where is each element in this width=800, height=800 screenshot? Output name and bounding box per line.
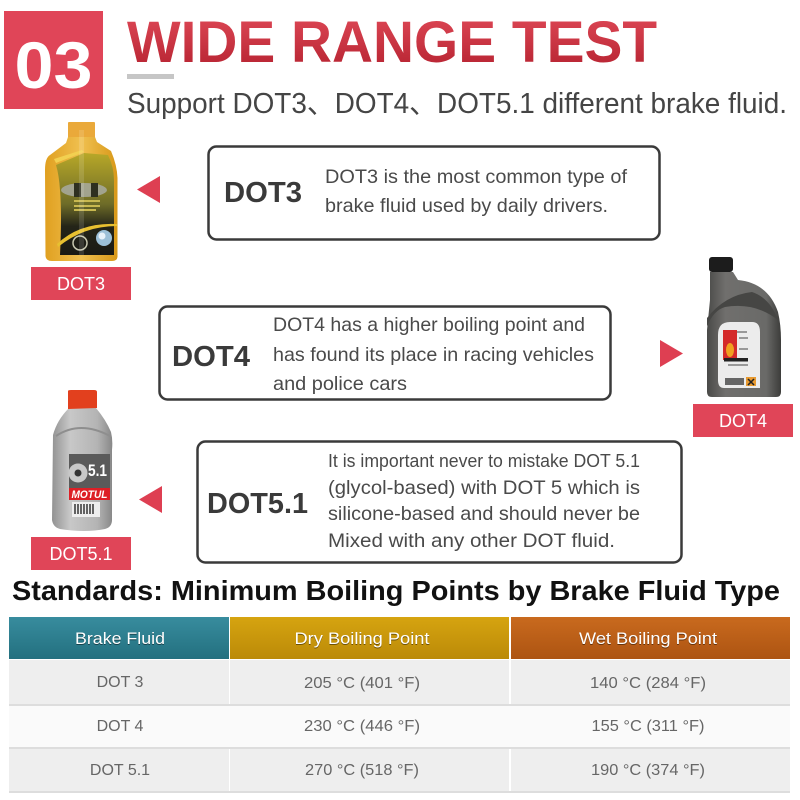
row: DOT 3 — [9, 660, 790, 706]
row: DOT 5.1 — [9, 749, 790, 793]
icon: DOT5.1 Motul bottle: 5.1 — [88, 461, 107, 480]
row: DOT 4: 155 °C (311 °F) — [592, 718, 704, 735]
row: DOT 4: DOT 4 — [97, 718, 144, 735]
panel: DOT5.1 description — [198, 442, 682, 562]
panel: DOT5.1 description: DOT5.1 — [207, 488, 308, 520]
panel: DOT5.1 description: Mixed with any other DOT fluid. — [328, 530, 615, 552]
panel: DOT5.1 description: It is important never to mistake DOT 5.1 — [328, 450, 640, 471]
icon: DOT5.1 Motul bottle: MOTUL — [72, 489, 108, 501]
row: DOT 3: DOT 3 — [97, 674, 144, 691]
row: DOT 5.1: DOT 5.1 — [90, 762, 150, 779]
header: dry boiling point — [230, 617, 509, 659]
panel: DOT4 description: and police cars — [273, 373, 407, 395]
icon: DOT5.1 Motul bottle — [52, 390, 112, 531]
title: WIDE RANGE TEST — [127, 10, 657, 75]
label: DOT3 — [31, 267, 131, 300]
panel: DOT3 description: brake fluid used by daily drivers. — [325, 195, 608, 217]
icon: DOT4 grey bottle — [707, 257, 781, 397]
header: wet boiling point: Wet Boiling Point — [579, 630, 717, 648]
row: DOT 4 — [9, 706, 790, 749]
arrow: to DOT5.1 bottle — [139, 486, 162, 513]
row: DOT 5.1: 190 °C (374 °F) — [591, 762, 705, 779]
arrow: to DOT4 bottle — [660, 340, 683, 367]
panel: DOT4 description: has found its place in racing vehicles — [273, 344, 594, 366]
icon: DOT3 gold bottle — [45, 122, 118, 261]
header: wet boiling point — [511, 617, 790, 659]
header: brake fluid — [9, 617, 229, 659]
label: DOT4 — [693, 404, 793, 437]
label: DOT5.1 — [31, 537, 131, 570]
section number badge — [4, 11, 103, 109]
panel: DOT5.1 description: silicone-based and should never be — [328, 503, 640, 525]
arrow: to DOT3 bottle — [137, 176, 160, 203]
subtitle: Support DOT3、DOT4、DOT5.1 different brake fluid. — [127, 88, 787, 120]
label: DOT4: DOT4 — [719, 411, 767, 431]
section number badge: 03 — [14, 28, 92, 102]
panel: DOT3 description: DOT3 — [224, 177, 302, 209]
row: DOT 3: 140 °C (284 °F) — [590, 675, 706, 692]
label: DOT3: DOT3 — [57, 274, 105, 294]
label: DOT5.1: DOT5.1 — [49, 544, 113, 564]
panel: DOT5.1 description: (glycol-based) with DOT 5 which is — [328, 477, 640, 499]
panel: DOT3 description — [208, 146, 660, 240]
header: dry boiling point: Dry Boiling Point — [294, 630, 430, 648]
row: DOT 5.1: 270 °C (518 °F) — [305, 762, 419, 779]
panel: DOT4 description — [160, 306, 610, 400]
header: brake fluid: Brake Fluid — [75, 630, 165, 648]
table heading: Standards: Minimum Boiling Points by Brake Fluid Type — [12, 575, 780, 606]
panel: DOT4 description: DOT4 has a higher boiling point and — [273, 314, 585, 336]
row: DOT 3: 205 °C (401 °F) — [304, 675, 420, 692]
row: DOT 4: 230 °C (446 °F) — [304, 718, 420, 735]
table: boiling points — [9, 617, 790, 793]
panel: DOT4 description: DOT4 — [172, 341, 250, 373]
panel: DOT3 description: DOT3 is the most common type of — [325, 166, 628, 188]
